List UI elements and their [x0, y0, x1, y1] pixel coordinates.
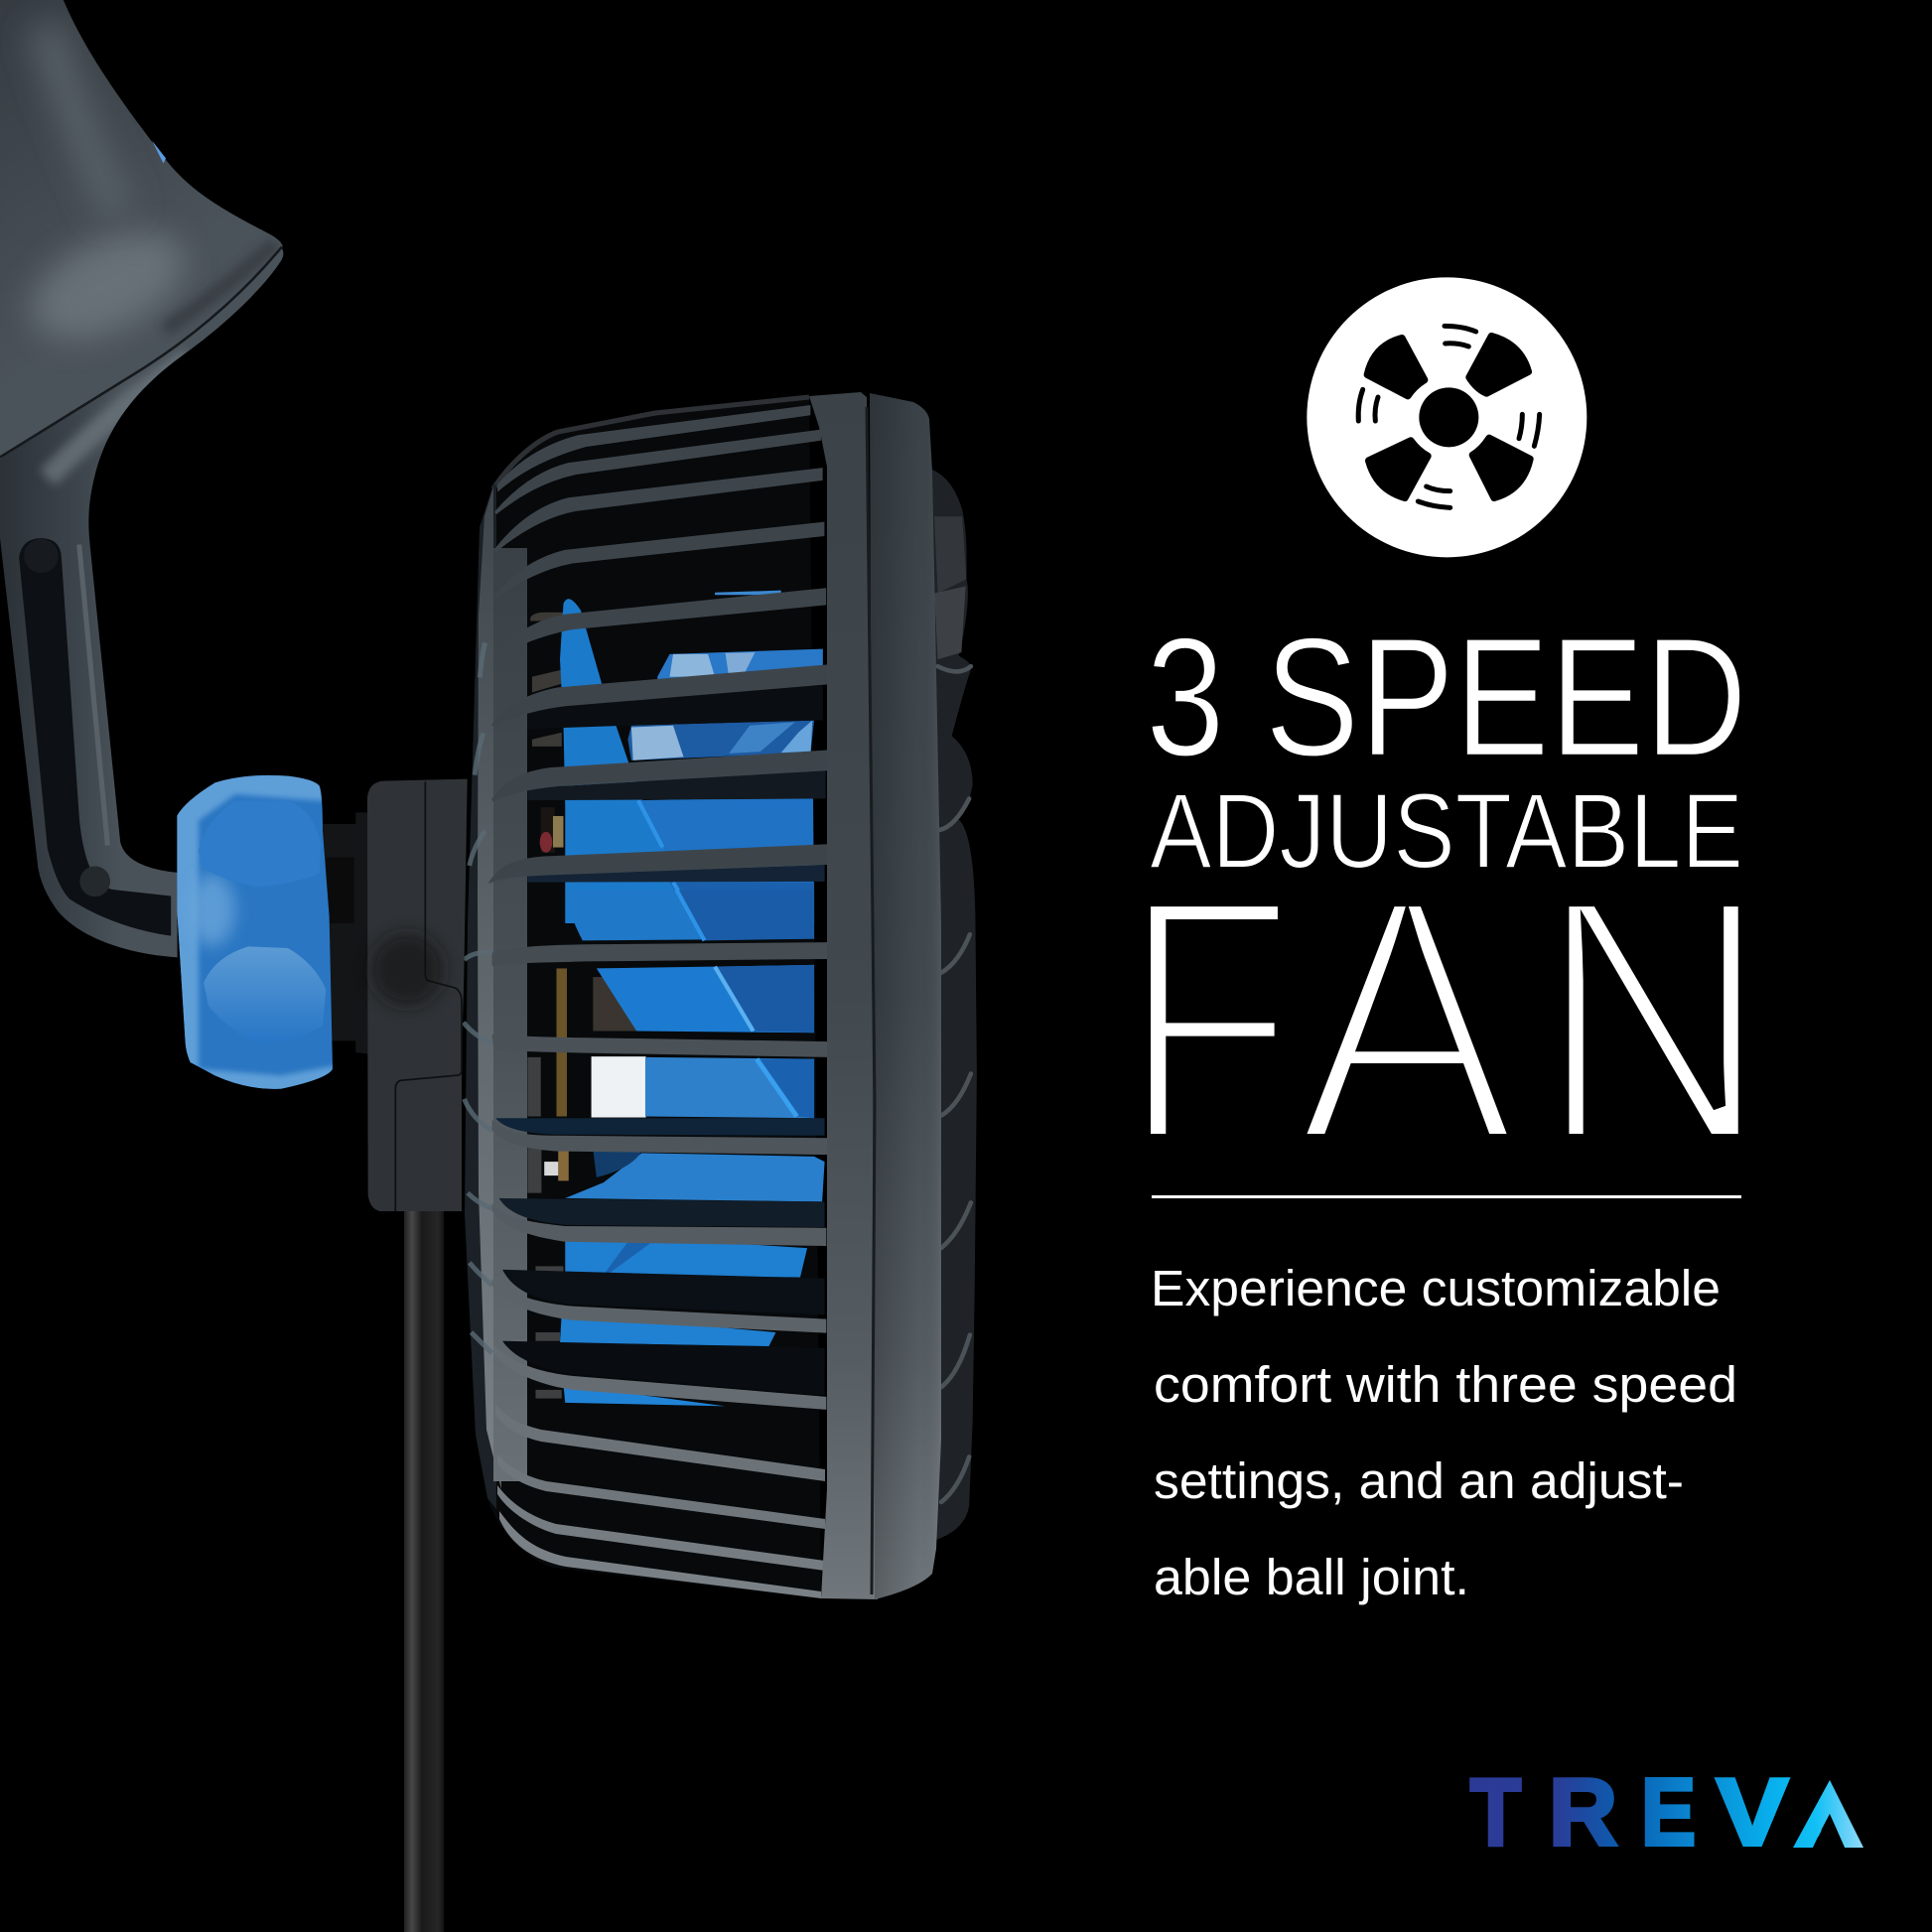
head seam: [0, 247, 282, 457]
fan internals, upper part: [527, 591, 826, 923]
brass strip: [556, 968, 567, 1116]
body text: able ball joint.: [1154, 1549, 1469, 1605]
blue glint: [152, 141, 166, 164]
icon disc: [1307, 277, 1587, 557]
heading: [1122, 603, 1771, 1215]
heading line: ADJUSTABLE: ADJUSTABLE: [1150, 770, 1743, 891]
cage outer side band: [465, 484, 496, 1509]
blade sliver at top: [715, 591, 781, 595]
logo: TREVA: E: [1641, 1759, 1696, 1865]
arm edge highlight: [79, 545, 107, 845]
cage top edge: [493, 397, 809, 488]
blue band one: [565, 890, 814, 940]
blue band three: [645, 1057, 814, 1118]
heading line: FAN: A: [1297, 823, 1519, 1215]
grille ribs, lower: [492, 942, 828, 1410]
body text: Experience customizable: [1151, 1260, 1721, 1316]
power cord: [404, 1201, 444, 1932]
knob upper face: [199, 801, 321, 887]
product photo: fan on arm: [0, 0, 977, 1932]
motor grey: [593, 977, 636, 1032]
icon blades: [1367, 337, 1530, 497]
head and arm: [0, 0, 283, 957]
blue band seven: [564, 1385, 726, 1406]
mount shadow: [370, 933, 444, 1006]
upper glossy blade: [657, 649, 823, 684]
icon hub: [1419, 387, 1478, 447]
front ring: [809, 392, 878, 1599]
body text: settings, and an adjust-: [1154, 1452, 1684, 1509]
white motor highlight: [592, 1056, 646, 1118]
arm slot screws: [24, 539, 59, 573]
main blade right: [640, 797, 814, 923]
cage inner column: [493, 548, 527, 1481]
grille ribs, upper: [492, 407, 830, 881]
mount seam: [395, 781, 462, 1211]
bracket pieces: [527, 1057, 564, 1399]
blue band six: [560, 1313, 775, 1346]
blue band five: [565, 1233, 807, 1278]
logo A notch: [1812, 1814, 1846, 1850]
blue band four: [565, 1153, 825, 1201]
shadow bands under ribs: [527, 685, 823, 729]
head highlights: [14, 26, 275, 360]
arm slot: [19, 538, 171, 936]
back rim: [867, 393, 941, 1599]
fan blade strip: [560, 599, 698, 923]
logo: TREVA: A: [1799, 1793, 1859, 1862]
heading line: FAN: F: [1122, 823, 1295, 1215]
body text: [1151, 1260, 1737, 1605]
cage silhouette backing: [465, 396, 821, 1598]
fan internals, lower part: [527, 890, 825, 1406]
motor mount: [367, 779, 468, 1211]
neck highlight: [48, 357, 190, 479]
knob pale edges: [169, 771, 335, 1095]
knob left glare: [189, 874, 235, 946]
rear motor housing: [927, 468, 977, 1541]
arm and neck: [0, 248, 283, 957]
knob lower face: [204, 946, 326, 1044]
grille ribs, bottom: [495, 1404, 825, 1598]
logo: TREVA: V: [1717, 1759, 1788, 1865]
internal bracket: [530, 613, 564, 747]
heading line: FAN: [1122, 823, 1771, 1215]
heading line: 3 SPEED: 3 SPEED: [1146, 603, 1747, 792]
cage side ticks: [464, 642, 492, 1353]
second glossy blade: [627, 721, 814, 760]
blue adjustment knob: [169, 771, 335, 1095]
icon motion lines: [1358, 326, 1540, 507]
blue band two: [597, 965, 814, 1033]
cage outer bar: [478, 486, 501, 1489]
head body: [0, 0, 282, 459]
icon: fan in white circle: [1307, 277, 1587, 557]
logo A shape: [1793, 1780, 1863, 1848]
body text: comfort with three speed: [1154, 1356, 1737, 1413]
logo: TREVA: [1470, 1759, 1863, 1865]
logo: TREVA: R: [1549, 1759, 1617, 1865]
divider rule: [1152, 1195, 1741, 1198]
ball joint collar: [321, 812, 369, 1054]
logo: TREVA: T: [1470, 1759, 1521, 1865]
blade edge highlight: [638, 800, 698, 923]
heading line: FAN: N: [1536, 823, 1771, 1215]
